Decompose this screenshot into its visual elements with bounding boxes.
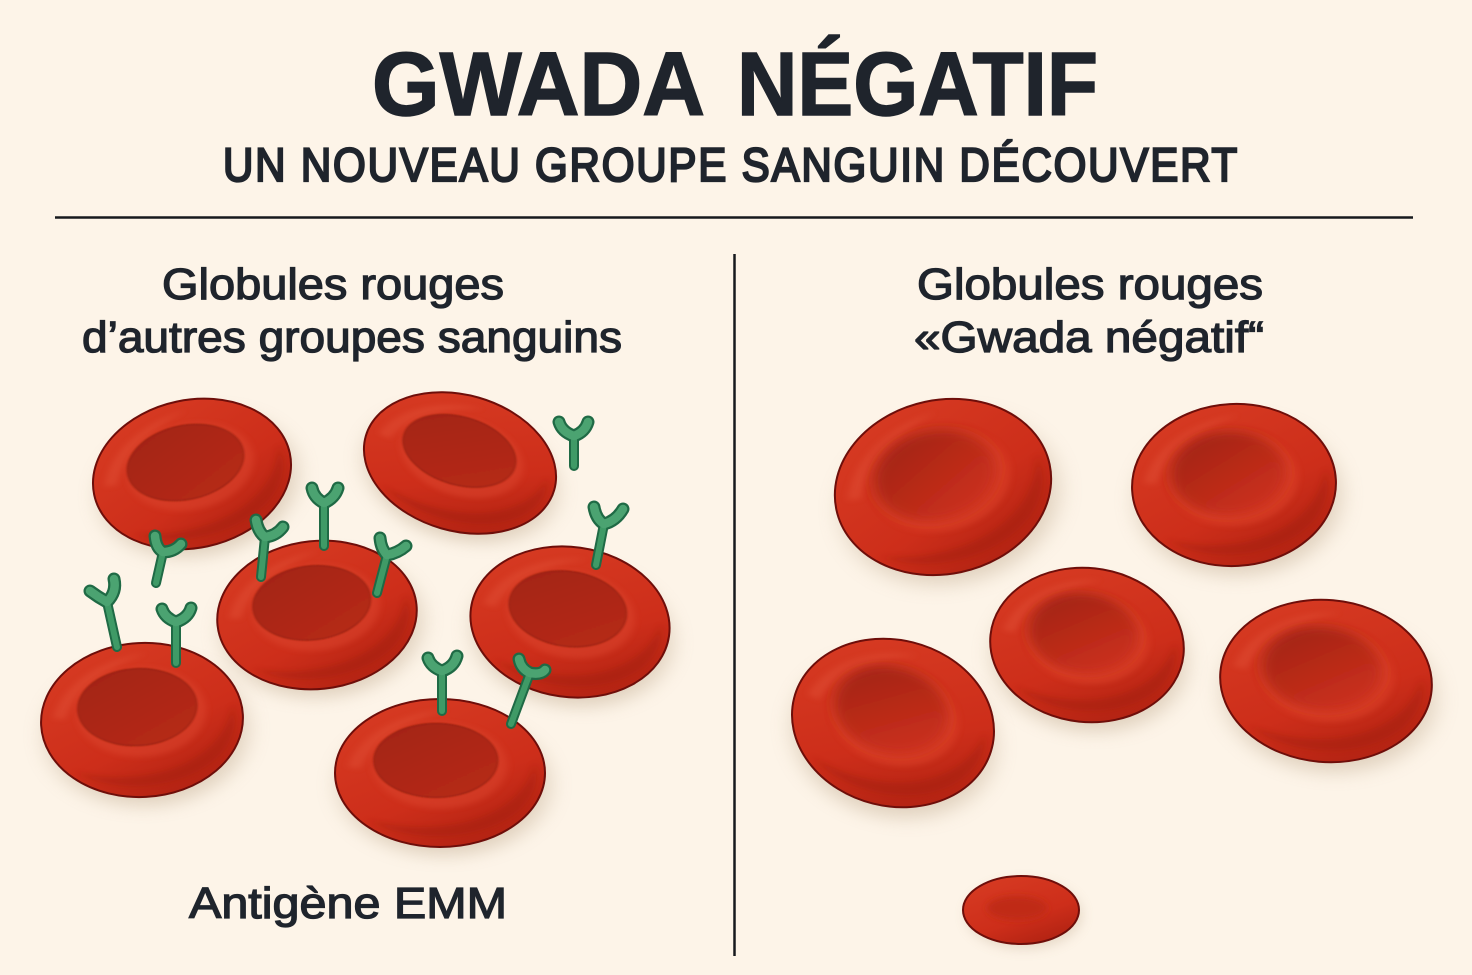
red blood cell 4 <box>1212 591 1443 781</box>
left heading: d’autres groupes sanguins <box>82 313 622 362</box>
red blood cell 1 <box>818 378 1074 605</box>
subtitle: UN NOUVEAU GROUPE SANGUIN DÉCOUVERT <box>223 138 1239 191</box>
red blood cell 2 <box>1128 399 1345 581</box>
red blood cell 3 <box>982 558 1195 741</box>
EMM antigens <box>90 422 623 724</box>
red blood cell 6 <box>335 699 549 856</box>
red blood cell 5 <box>37 638 251 811</box>
title: NÉGATIF <box>737 34 1098 135</box>
right heading <box>914 260 1264 362</box>
small red blood cell <box>963 876 1082 949</box>
red blood cell 5 <box>772 618 1016 839</box>
red blood cell 3 <box>210 531 429 708</box>
red blood cell 2 <box>345 371 577 564</box>
title <box>372 34 1098 135</box>
right heading: Globules rouges <box>917 260 1263 309</box>
red blood cell 4 <box>459 534 683 720</box>
left heading <box>82 260 622 362</box>
right heading: «Gwada négatif“ <box>914 313 1264 362</box>
red blood cell 1 <box>79 380 311 576</box>
panel: Gwada negative <box>772 260 1443 949</box>
antigen label: Antigène EMM <box>189 879 507 928</box>
title: GWADA <box>372 35 705 135</box>
left heading: Globules rouges <box>162 260 504 309</box>
panel: other blood groups <box>37 260 683 928</box>
